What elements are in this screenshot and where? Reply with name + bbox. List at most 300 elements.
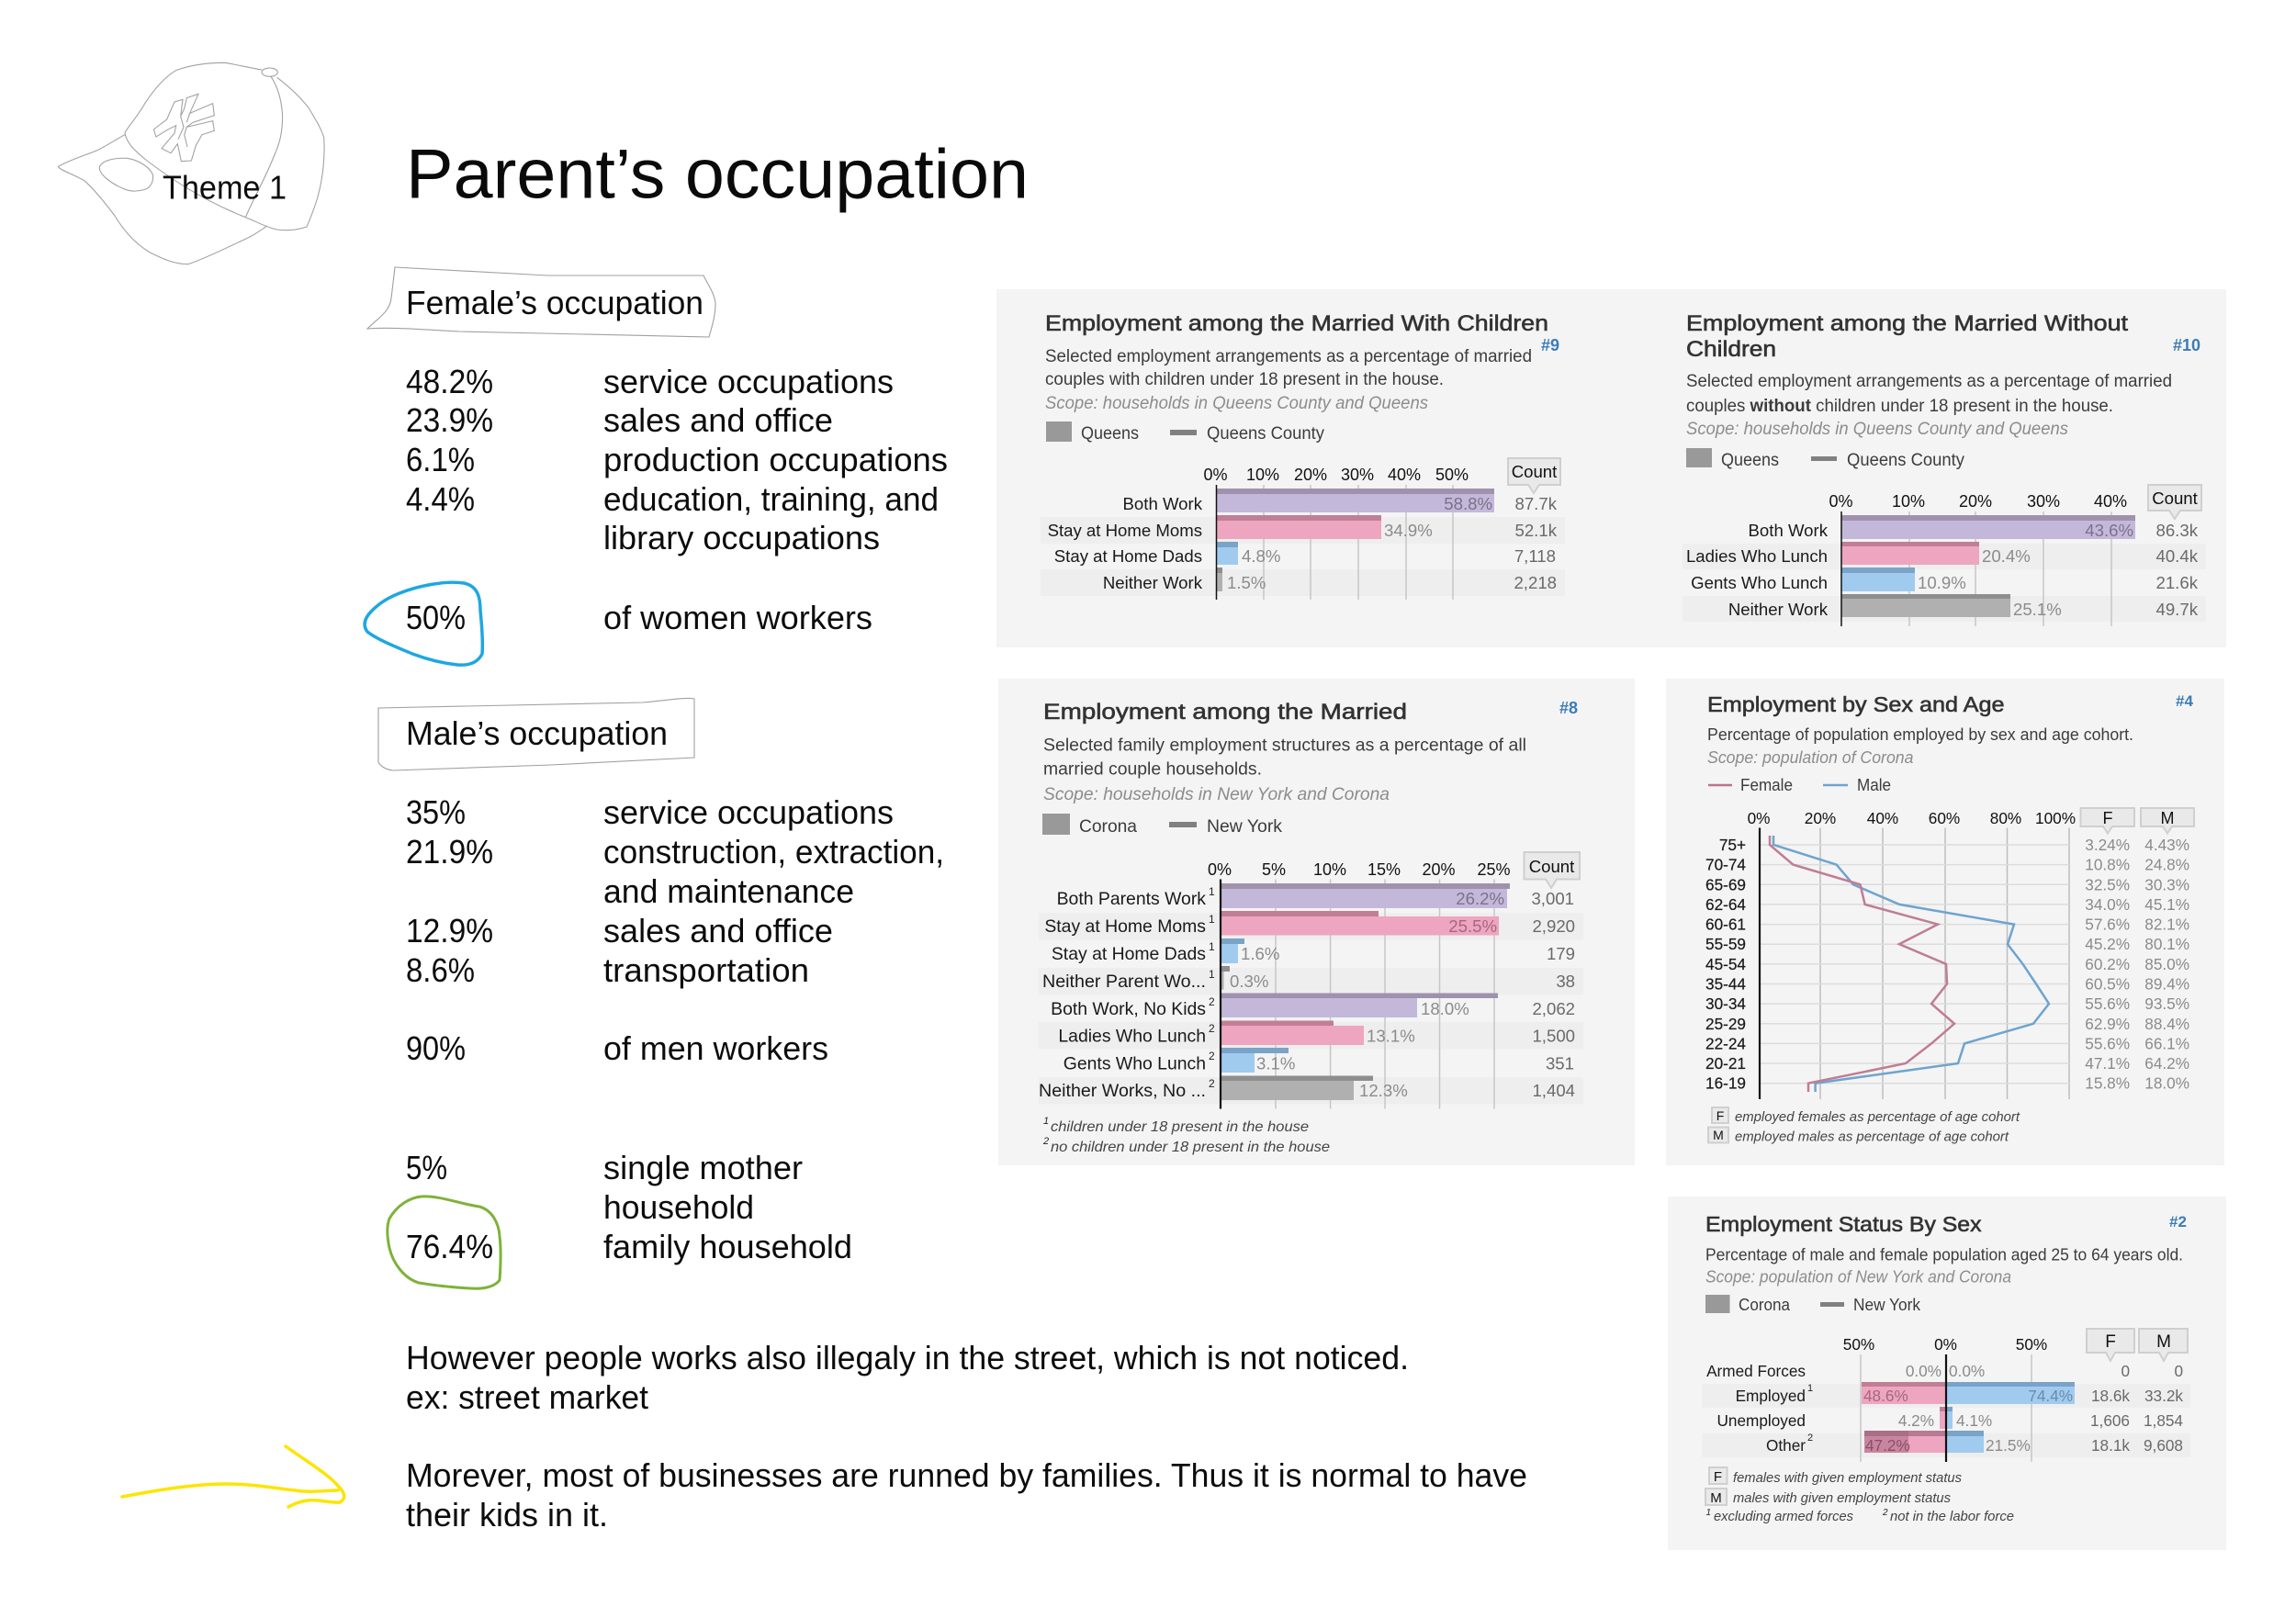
chart number: #2 <box>2169 1213 2187 1230</box>
description: Scope: households in New York and Corona <box>1043 785 1390 804</box>
axis: 15% <box>1367 860 1401 879</box>
row footnote markers: 2 <box>1209 1022 1215 1035</box>
row labels: 16-19 <box>1705 1074 1746 1093</box>
legend <box>1686 448 1964 470</box>
description: married couple households. <box>1043 760 1262 779</box>
F column: 18.1k <box>2091 1436 2130 1455</box>
row labels <box>1039 889 1206 1101</box>
F column: 60.5% <box>2085 975 2130 994</box>
axis: 10% <box>1246 466 1279 484</box>
key and footnotes: females with given employment status <box>1733 1470 1962 1486</box>
icon: yellow arrow <box>122 1446 344 1507</box>
text block: street market note: ex: street market <box>406 1378 648 1416</box>
value labels: 13.1% <box>1367 1027 1415 1045</box>
row labels: Gents Who Lunch <box>1691 573 1828 592</box>
legend <box>1708 776 1891 794</box>
legend: Female <box>1740 776 1793 794</box>
chart number: #8 <box>1559 699 1578 717</box>
row footnote markers: 1 <box>1807 1383 1813 1394</box>
count column: 38 <box>1556 972 1575 991</box>
M column: 0 <box>2174 1362 2183 1380</box>
value labels: 58.8% <box>1444 494 1492 513</box>
row labels: Both Work <box>1749 521 1829 540</box>
description: Scope: population of New York and Corona <box>1705 1267 2011 1286</box>
chart: employment among the married without children <box>1683 311 2206 626</box>
footnotes: children under 18 present in the house <box>1051 1119 1309 1135</box>
row labels: Unemployed <box>1717 1411 1806 1430</box>
axis: 0% <box>1208 860 1232 879</box>
percentages and occupations list: and maintenance <box>603 872 854 910</box>
callout: 50% of women workers, blue circle <box>365 582 872 665</box>
value labels: 20.4% <box>1982 546 2031 566</box>
value labels: 74.4% <box>2028 1387 2073 1405</box>
row labels: 45-54 <box>1705 955 1746 973</box>
row labels: 22-24 <box>1705 1034 1746 1052</box>
key and footnotes: 2 <box>1882 1508 1888 1518</box>
axis and grid: 0% <box>1748 809 1770 827</box>
axis and grid: 100% <box>2035 809 2076 827</box>
panel: employment among the married with and without children <box>996 289 2226 647</box>
legend: Corona <box>1079 817 1137 837</box>
M column: 80.1% <box>2144 935 2189 953</box>
row labels: Stay at Home Moms <box>1048 521 1202 540</box>
M column <box>2139 1329 2188 1455</box>
M column: 33.2k <box>2144 1387 2183 1405</box>
M column: 9,608 <box>2144 1436 2183 1455</box>
household list: 76.4% <box>406 1228 493 1265</box>
axis: 50% <box>1435 466 1469 484</box>
F column: 47.1% <box>2085 1054 2130 1073</box>
chart heading <box>1686 311 2128 362</box>
row stripes <box>1702 1384 2190 1457</box>
row footnote markers: 2 <box>1209 1050 1215 1062</box>
value labels: 3.1% <box>1256 1054 1295 1073</box>
row labels: Other <box>1766 1436 1806 1455</box>
M column: 18.0% <box>2144 1074 2189 1093</box>
value labels <box>1230 889 1504 1100</box>
row labels <box>1686 521 1829 619</box>
F column: 55.6% <box>2085 1034 2130 1052</box>
count column: 49.7k <box>2156 600 2199 619</box>
row labels: 35-44 <box>1705 975 1746 994</box>
count column: 2,920 <box>1532 916 1575 936</box>
F column: 18.6k <box>2091 1387 2130 1405</box>
row labels: Both Work <box>1123 494 1203 513</box>
count column: 86.3k <box>2156 521 2199 540</box>
title: Parent’s occupation <box>406 136 1029 213</box>
M column: 4.43% <box>2144 836 2189 854</box>
description: couples without children under 18 present in the house. <box>1686 397 2113 416</box>
row stripes <box>1041 517 1565 596</box>
value labels <box>1918 521 2133 619</box>
row labels: 65-69 <box>1705 875 1746 893</box>
M column: 89.4% <box>2144 975 2189 994</box>
key and footnotes <box>1705 1467 2014 1524</box>
F column: 60.2% <box>2085 955 2130 973</box>
count column <box>1525 852 1580 1100</box>
row labels: Neither Work <box>1728 600 1829 619</box>
F column: 0 <box>2121 1362 2130 1380</box>
percentages and occupations list: 6.1% <box>406 441 475 478</box>
row stripes <box>1039 913 1583 1104</box>
household list: single mother <box>603 1149 803 1186</box>
household list: family household <box>603 1228 852 1265</box>
value labels: 25.1% <box>2013 600 2062 619</box>
F column: 3.24% <box>2085 836 2130 854</box>
description: couples with children under 18 present in the house. <box>1045 370 1444 389</box>
row labels <box>1706 1362 1806 1455</box>
F column: 32.5% <box>2085 875 2130 893</box>
legend: Corona <box>1739 1296 1791 1314</box>
count column: Count <box>2152 489 2199 508</box>
row labels: Neither Work <box>1103 573 1203 592</box>
percentages and occupations list <box>406 793 944 1067</box>
M column: 66.1% <box>2144 1034 2189 1052</box>
description: Selected family employment structures as a percentage of all <box>1043 736 1526 755</box>
description <box>1686 372 2172 439</box>
key: F <box>1716 1108 1724 1123</box>
M column: 30.3% <box>2144 875 2189 893</box>
household list: 5% <box>406 1149 447 1186</box>
value labels: 0.0% <box>1906 1362 1941 1380</box>
row footnote markers: 1 <box>1209 913 1215 926</box>
value labels: 26.2% <box>1456 889 1504 908</box>
count column: 52.1k <box>1515 521 1558 540</box>
row labels: Stay at Home Moms <box>1044 916 1206 937</box>
M column: 64.2% <box>2144 1054 2189 1073</box>
key and footnotes: F <box>1714 1469 1722 1485</box>
legend: Queens <box>1721 451 1779 470</box>
row footnote markers <box>1209 885 1215 1090</box>
F column: 10.8% <box>2085 856 2130 874</box>
value labels: 48.6% <box>1863 1387 1908 1405</box>
row footnote markers: 1 <box>1209 940 1215 953</box>
household list <box>406 1149 852 1265</box>
percentages and occupations list: 90% <box>406 1029 466 1067</box>
axis: 40% <box>1388 466 1421 484</box>
M column: 24.8% <box>2144 856 2189 874</box>
percentages and occupations list: service occupations <box>603 363 894 400</box>
icon: baseball cap sketch <box>58 62 324 264</box>
row labels: Employed <box>1736 1387 1806 1405</box>
count column: 40.4k <box>2156 546 2199 566</box>
value labels: 10.9% <box>1918 573 1966 592</box>
value labels: 1.6% <box>1241 944 1279 963</box>
F column: F <box>2103 809 2112 827</box>
row footnote markers: 1 <box>1209 885 1215 898</box>
F column: 55.6% <box>2085 994 2130 1013</box>
axis: 30% <box>1341 466 1374 484</box>
axis and grid <box>1748 809 2076 1099</box>
footnotes <box>1042 1116 1330 1155</box>
count column: 21.6k <box>2156 573 2199 592</box>
chart heading: Employment among the Married Without <box>1686 311 2128 336</box>
banner: Female's occupation <box>367 267 715 337</box>
F column: 1,606 <box>2090 1411 2130 1430</box>
line: female employment <box>1770 836 1954 1092</box>
legend <box>1705 1295 1921 1314</box>
footnotes: 2 <box>1042 1136 1049 1147</box>
percentages and occupations list: transportation <box>603 951 809 989</box>
M column: 45.1% <box>2144 895 2189 914</box>
F column: 34.0% <box>2085 895 2130 914</box>
row footnote markers: 2 <box>1209 1077 1215 1090</box>
text block: street market note <box>406 1339 1409 1416</box>
count column: 7,118 <box>1514 546 1556 566</box>
axis: 0% <box>1829 492 1853 511</box>
count column: 1,404 <box>1532 1081 1575 1100</box>
row labels <box>1705 836 1746 1093</box>
M column: 1,854 <box>2144 1411 2183 1430</box>
row labels: 75+ <box>1719 836 1746 854</box>
legend: Queens County <box>1207 424 1324 444</box>
key and footnotes: males with given employment status <box>1733 1490 1951 1506</box>
description <box>1045 347 1532 413</box>
axis and grid: 80% <box>1990 809 2021 827</box>
panel: employment among the married <box>998 679 1635 1165</box>
row labels: 25-29 <box>1705 1015 1746 1033</box>
row labels: 70-74 <box>1705 856 1746 874</box>
axis: 0% <box>1203 466 1228 484</box>
percentages and occupations list: of men workers <box>603 1029 828 1067</box>
description <box>1705 1245 2183 1286</box>
F column: F <box>2105 1332 2116 1352</box>
row footnote markers: 2 <box>1807 1433 1813 1444</box>
description: Scope: households in Queens County and Queens <box>1045 394 1428 413</box>
row labels: 62-64 <box>1705 895 1746 914</box>
percentages and occupations list: construction, extraction, <box>603 833 944 871</box>
bars <box>1216 485 1494 600</box>
percentages and occupations list: 48.2% <box>406 363 493 400</box>
M column: 82.1% <box>2144 916 2189 934</box>
description <box>1043 736 1526 804</box>
chart number: #10 <box>2173 336 2200 354</box>
callout: 50% of women workers, blue circle: 50% <box>406 599 466 636</box>
legend: Male <box>1857 776 1891 794</box>
text block: street market note: However people works also illegaly in the street, which is not noticed. <box>406 1339 1409 1376</box>
axis: 50% <box>1843 1335 1874 1354</box>
percentages and occupations list: 21.9% <box>406 833 493 871</box>
panel: employment status by sex <box>1668 1197 2226 1550</box>
count column <box>1508 458 1560 592</box>
axis <box>1843 1335 2047 1462</box>
value labels: 18.0% <box>1421 999 1469 1018</box>
chart heading: Children <box>1686 337 1776 362</box>
description <box>1707 725 2133 767</box>
percentages and occupations list: production occupations <box>603 441 948 478</box>
count column: 2,218 <box>1514 573 1557 592</box>
F column: 15.8% <box>2085 1074 2130 1093</box>
chart number: #9 <box>1541 336 1559 354</box>
legend <box>1046 421 1324 444</box>
row labels: Both Work, No Kids <box>1051 999 1206 1019</box>
description: Scope: population of Corona <box>1707 748 1914 767</box>
row footnote markers <box>1807 1383 1813 1444</box>
label: Theme 1: Theme 1 <box>163 169 287 206</box>
axis: 50% <box>2016 1335 2047 1354</box>
row labels: Stay at Home Dads <box>1052 944 1206 964</box>
banner: Female's occupation: Female’s occupation <box>406 284 703 321</box>
key: employed females as percentage of age cohort <box>1735 1109 2020 1125</box>
value labels: 43.6% <box>2085 521 2133 540</box>
row footnote markers: 1 <box>1209 968 1215 981</box>
line: male employment <box>1773 836 2049 1092</box>
count column: 351 <box>1546 1054 1574 1073</box>
key and footnotes: excluding armed forces <box>1714 1509 1853 1524</box>
count column: Count <box>1512 462 1558 481</box>
percentages and occupations list: 35% <box>406 793 466 831</box>
percentages and occupations list: service occupations <box>603 793 894 831</box>
value labels: 4.2% <box>1898 1411 1934 1430</box>
percentages and occupations list: 23.9% <box>406 401 493 439</box>
count column: 1,500 <box>1532 1027 1575 1045</box>
chart heading: Employment among the Married <box>1043 700 1407 725</box>
percentages and occupations list: sales and office <box>603 401 833 439</box>
key: employed males as percentage of age cohort <box>1735 1129 2009 1144</box>
M column <box>2141 808 2194 1093</box>
text block: family businesses note: Morever, most of businesses are runned by families. Thus it is normal to have <box>406 1456 1527 1494</box>
axis: 30% <box>2027 492 2060 511</box>
key <box>1708 1107 2020 1144</box>
axis: 20% <box>1422 860 1456 879</box>
value labels: 0.3% <box>1230 972 1268 991</box>
chart heading: Employment Status By Sex <box>1705 1212 1982 1236</box>
description: Scope: households in Queens County and Queens <box>1686 420 2068 439</box>
M column: M <box>2160 809 2175 827</box>
key: M <box>1713 1128 1724 1142</box>
axis <box>1829 492 2127 626</box>
value labels <box>1863 1362 2073 1455</box>
count column: Count <box>1529 857 1575 876</box>
axis: 0% <box>1934 1335 1957 1354</box>
M column: 85.0% <box>2144 955 2189 973</box>
axis <box>1203 466 1469 600</box>
text block: family businesses note: their kids in it. <box>406 1496 608 1534</box>
row labels: Ladies Who Lunch <box>1058 1027 1206 1047</box>
F column: 62.9% <box>2085 1015 2130 1033</box>
legend <box>1042 814 1282 837</box>
bars <box>1221 880 1510 1109</box>
count column: 179 <box>1547 944 1575 963</box>
percentages and occupations list: 8.6% <box>406 951 475 989</box>
section: male occupation <box>378 698 944 1067</box>
percentages and occupations list: 4.4% <box>406 480 475 518</box>
axis and grid: 40% <box>1867 809 1898 827</box>
description: Percentage of population employed by sex and age cohort. <box>1707 725 2133 744</box>
text block: family businesses note <box>406 1456 1527 1534</box>
row labels: Neither Parent Wo... <box>1042 972 1206 992</box>
household list: household <box>603 1188 754 1226</box>
diverging bars <box>1862 1354 2075 1462</box>
legend: New York <box>1207 817 1282 837</box>
value labels: 21.5% <box>1986 1436 2031 1455</box>
M column: M <box>2156 1332 2171 1352</box>
axis: 10% <box>1892 492 1925 511</box>
axis <box>1208 860 1511 1109</box>
key and footnotes: not in the labor force <box>1890 1509 2014 1524</box>
row labels: 60-61 <box>1705 916 1746 934</box>
legend: New York <box>1853 1296 1921 1314</box>
row labels: Both Parents Work <box>1057 889 1206 909</box>
axis: 40% <box>2094 492 2127 511</box>
legend: Queens <box>1081 424 1139 444</box>
percentages and occupations list: 12.9% <box>406 912 493 949</box>
M column: 93.5% <box>2144 994 2189 1013</box>
count column: 2,062 <box>1532 999 1575 1018</box>
percentages and occupations list: library occupations <box>603 519 880 556</box>
axis: 25% <box>1477 860 1511 879</box>
count column: 3,001 <box>1531 889 1574 908</box>
description: Percentage of male and female population aged 25 to 64 years old. <box>1705 1245 2183 1264</box>
axis: 10% <box>1313 860 1346 879</box>
row stripes <box>1683 544 2206 622</box>
banner: Male's occupation <box>378 698 694 770</box>
chart heading: Employment by Sex and Age <box>1707 692 2004 716</box>
value labels: 1.5% <box>1227 573 1266 592</box>
footnotes: no children under 18 present in the house <box>1051 1140 1330 1155</box>
footnotes: 1 <box>1043 1116 1049 1127</box>
value labels <box>1227 494 1492 592</box>
row labels: Stay at Home Dads <box>1054 546 1202 566</box>
count column <box>2148 485 2201 619</box>
row labels: Gents Who Lunch <box>1064 1054 1206 1074</box>
axis: 20% <box>1959 492 1992 511</box>
value labels: 4.8% <box>1242 546 1280 566</box>
chart: employment among the married with children <box>1041 311 1565 600</box>
value labels: 25.5% <box>1448 916 1497 936</box>
axis: 20% <box>1294 466 1327 484</box>
percentages and occupations list: sales and office <box>603 912 833 949</box>
M column: 88.4% <box>2144 1015 2189 1033</box>
row labels: 20-21 <box>1705 1054 1746 1073</box>
bars <box>1841 511 2135 626</box>
value labels: 12.3% <box>1359 1081 1408 1100</box>
row labels: Neither Works, No ... <box>1039 1081 1206 1101</box>
F column: 57.6% <box>2085 916 2130 934</box>
section: female occupation <box>365 267 948 665</box>
axis: 5% <box>1262 860 1286 879</box>
axis and grid: 60% <box>1929 809 1960 827</box>
F column <box>2081 808 2134 1093</box>
axis and grid: 20% <box>1805 809 1836 827</box>
row labels: 30-34 <box>1705 994 1746 1013</box>
value labels: 47.2% <box>1865 1436 1910 1455</box>
row labels: Armed Forces <box>1706 1362 1806 1380</box>
key and footnotes: 1 <box>1706 1508 1711 1518</box>
value labels: 0.0% <box>1949 1362 1985 1380</box>
banner: Male's occupation: Male’s occupation <box>406 714 668 752</box>
count column: 87.7k <box>1515 494 1558 513</box>
row labels: 55-59 <box>1705 935 1746 953</box>
description: Selected employment arrangements as a percentage of married <box>1045 347 1532 366</box>
chart heading: Employment among the Married With Children <box>1045 311 1548 336</box>
icon: green hand-drawn circle <box>388 1197 501 1288</box>
row footnote markers: 2 <box>1209 995 1215 1008</box>
F column <box>2087 1329 2134 1455</box>
legend: Queens County <box>1847 451 1964 470</box>
description: Selected employment arrangements as a percentage of married <box>1686 372 2172 391</box>
value labels: 34.9% <box>1384 521 1433 540</box>
percentages and occupations list: education, training, and <box>603 480 939 518</box>
callout: 50% of women workers, blue circle: of women workers <box>603 599 872 636</box>
value labels: 4.1% <box>1956 1411 1992 1430</box>
percentages and occupations list <box>406 363 948 556</box>
chart number: #4 <box>2176 692 2193 710</box>
section: household types <box>388 1149 852 1288</box>
row labels <box>1048 494 1203 592</box>
row labels: Ladies Who Lunch <box>1686 546 1828 566</box>
key and footnotes: M <box>1710 1490 1722 1506</box>
